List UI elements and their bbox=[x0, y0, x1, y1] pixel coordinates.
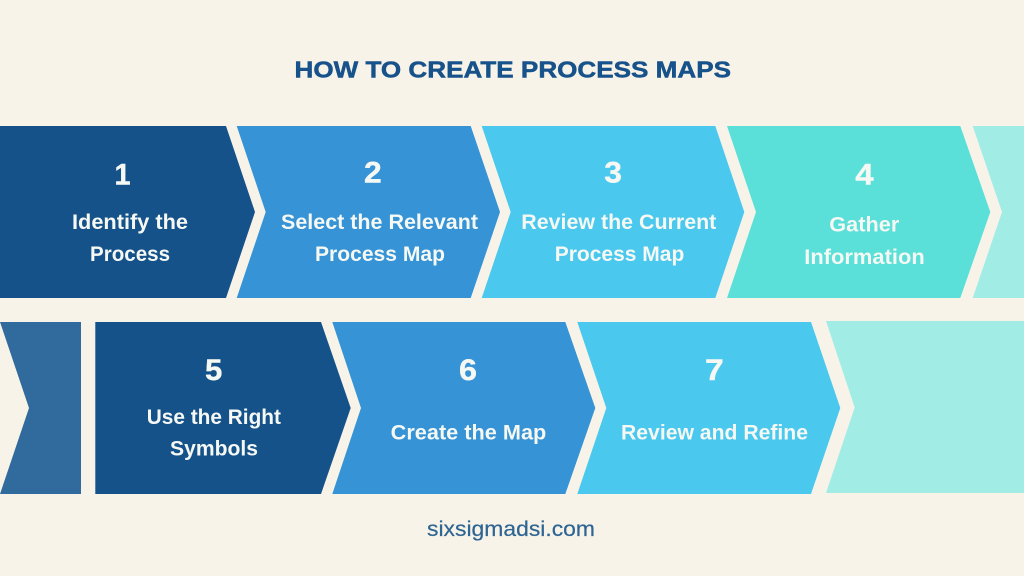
step 3: review the current process map: Process Map bbox=[555, 242, 684, 266]
step 6: create the map: Create the Map bbox=[391, 420, 546, 444]
title: HOW TO CREATE PROCESS MAPS bbox=[294, 56, 731, 82]
step 6: create the map: 6 bbox=[459, 354, 477, 387]
footer website: sixsigmadsi.com bbox=[427, 518, 595, 541]
step 7: review and refine bbox=[577, 322, 840, 494]
step 3: review the current process map bbox=[482, 126, 744, 298]
step 1: identify the process: 1 bbox=[114, 159, 130, 192]
step 5: use the right symbols: 5 bbox=[205, 354, 222, 387]
step 5: use the right symbols bbox=[95, 322, 351, 494]
step 4: gather information: 4 bbox=[855, 159, 874, 192]
step 1: identify the process: Process bbox=[90, 242, 170, 266]
step 3: review the current process map: Review the Current bbox=[521, 210, 716, 234]
step 4: gather information: Gather bbox=[829, 213, 900, 237]
step 7: review and refine: 7 bbox=[705, 354, 724, 387]
step 5: use the right symbols: Symbols bbox=[170, 437, 258, 461]
step 4: gather information bbox=[727, 126, 990, 298]
step 7: review and refine: Review and Refine bbox=[621, 420, 808, 444]
step 4: gather information: Information bbox=[804, 245, 925, 269]
step 1: identify the process bbox=[0, 126, 255, 298]
decorative partial arrow: bottom left bbox=[0, 322, 81, 494]
step 2: select the relevant process map: Select the Relevant bbox=[281, 210, 478, 234]
decorative partial arrow: top right bbox=[973, 126, 1024, 298]
step 6: create the map bbox=[332, 322, 595, 494]
step 3: review the current process map: 3 bbox=[604, 157, 622, 190]
step 2: select the relevant process map: 2 bbox=[364, 157, 382, 190]
step 2: select the relevant process map: Process Map bbox=[315, 242, 445, 266]
decorative empty arrow: bottom right bbox=[826, 321, 1024, 493]
step 2: select the relevant process map bbox=[237, 126, 500, 298]
step 5: use the right symbols: Use the Right bbox=[147, 405, 281, 429]
step 1: identify the process: Identify the bbox=[72, 210, 188, 234]
